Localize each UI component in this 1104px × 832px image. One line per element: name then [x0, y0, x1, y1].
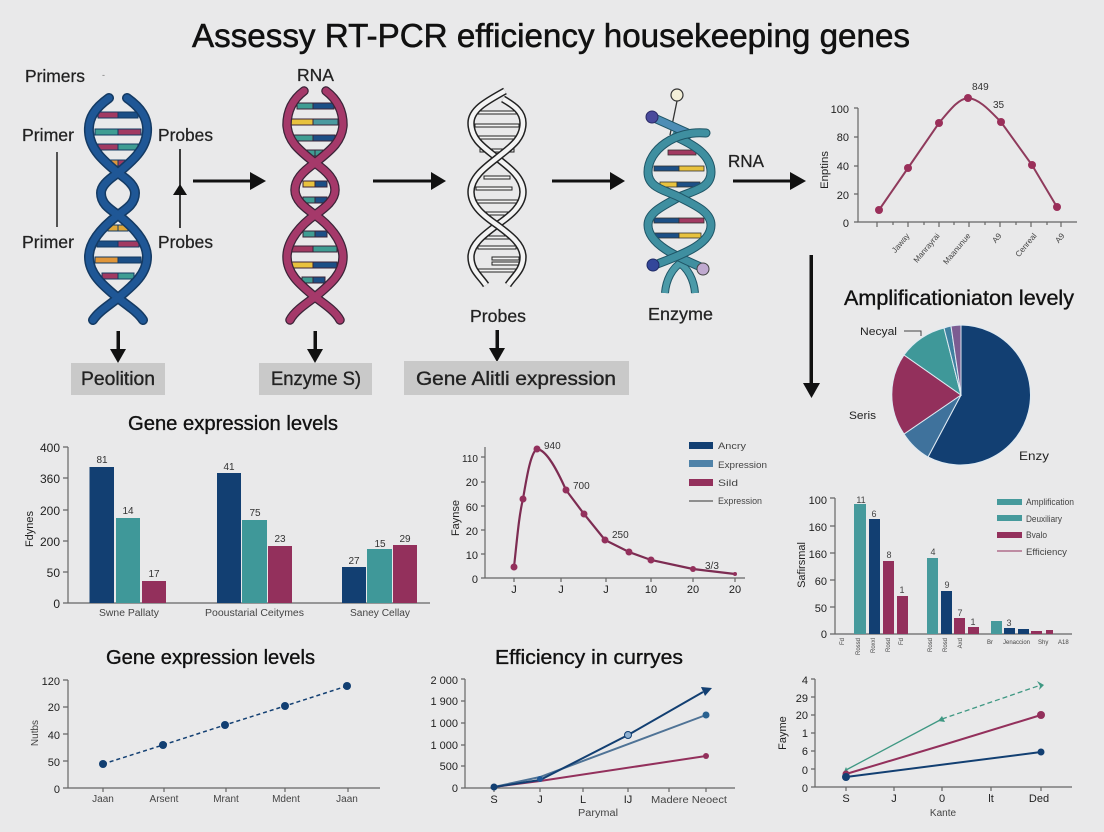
bar chart: right: 7 — [957, 608, 963, 618]
line chart: bottom left: Mdent — [272, 794, 300, 805]
bar chart: right: Rosd — [886, 638, 892, 652]
bar chart: gene expression: Swne Pallaty — [99, 608, 159, 619]
line chart: bottom left: Mrant — [213, 794, 239, 805]
line chart: bottom right: Ded — [1029, 793, 1049, 805]
line chart: decay curve: 20 — [466, 526, 478, 538]
bar chart: right: 6 — [871, 509, 877, 519]
bar chart: gene expression: 15 — [374, 539, 386, 550]
line chart: bottom right: Fayme — [777, 716, 789, 750]
bar chart: right: Fd — [840, 638, 846, 645]
line chart: top right: Maanunue — [941, 231, 973, 266]
line chart: bottom right: 6 — [802, 746, 808, 758]
primer connector line — [56, 152, 58, 227]
bar chart: right: Axd — [958, 638, 964, 648]
line chart: top right: 20 — [837, 190, 849, 202]
line chart: bottom right — [777, 675, 1072, 819]
line chart: decay curve: 700 — [573, 481, 590, 492]
helix labels: Probes — [158, 125, 213, 145]
line chart: top right — [819, 82, 1077, 266]
bar chart: right: Roxxl — [871, 638, 877, 653]
line chart: bottom left — [30, 676, 380, 805]
pie labels: Necyal — [860, 326, 897, 338]
line chart: top right: Jaway — [890, 232, 912, 255]
line chart: efficiency curves: S — [490, 794, 498, 806]
bar chart: right: A18 — [1058, 640, 1069, 646]
legend: right bar chart — [997, 497, 1074, 557]
bar chart: gene expression: 27 — [348, 556, 360, 567]
line chart: decay curve: J — [558, 584, 564, 596]
line chart: top right: 35 — [993, 100, 1005, 111]
pie chart — [892, 325, 1030, 465]
line chart: bottom right: lt — [988, 793, 994, 805]
line chart: top right: 40 — [837, 161, 849, 173]
arrows: process flow — [193, 172, 806, 190]
line chart: bottom right: 29 — [796, 693, 808, 705]
DNA helix: enzyme (teal with knobs) — [646, 89, 711, 293]
bar chart: gene expression: 17 — [148, 569, 160, 580]
box: Peolition: Peolition — [81, 369, 155, 390]
line chart: decay curve: 10 — [645, 584, 657, 596]
line chart: bottom left: 120 — [42, 676, 60, 688]
bar chart: gene expression: 81 — [96, 455, 108, 466]
bar chart: right: Jenaccion — [1003, 640, 1030, 646]
bar chart: right: 3 — [1006, 618, 1012, 628]
line chart: bottom left: 0 — [54, 784, 60, 796]
bar chart: right: 50 — [815, 603, 827, 615]
line chart: decay curve: 20 — [687, 584, 699, 596]
bar chart: right: 160 — [809, 522, 827, 534]
line chart: decay curve: J — [511, 584, 517, 596]
helix labels: Probes — [158, 232, 213, 252]
bar chart: gene expression: 0 — [53, 597, 60, 611]
bar chart: right — [796, 495, 1072, 655]
bar chart: gene expression: Pooustarial Ceitymes — [205, 608, 304, 619]
legend: right bar chart: Efficiency — [1026, 547, 1068, 557]
line chart: bottom right: 4 — [802, 675, 808, 687]
line chart: bottom right: S — [842, 793, 850, 805]
heading: gene expression levels 2: Gene expression levels — [106, 647, 315, 669]
bar chart: right: 4 — [930, 547, 936, 557]
line chart: efficiency curves: 2 000 — [430, 675, 458, 687]
bar chart: right: Rosd — [928, 638, 934, 652]
line chart: efficiency curves: IJ — [624, 794, 632, 806]
bar chart: gene expression: 360 — [40, 472, 60, 486]
line chart: efficiency curves: 0 — [452, 783, 458, 795]
line chart: bottom right: 1 — [802, 728, 808, 740]
bar chart: right: 1 — [899, 585, 905, 595]
box: Enzyme — [259, 363, 372, 395]
line chart: bottom right: 0 — [802, 783, 808, 795]
bar chart: gene expression: Saney Cellay — [350, 608, 410, 619]
bar chart: right: 8 — [886, 550, 892, 560]
legend: decay curve: Ancry — [718, 441, 747, 451]
line chart: bottom left: Jaan — [92, 794, 114, 805]
line chart: decay curve: 250 — [612, 530, 629, 541]
bar chart: right: 0 — [821, 629, 827, 641]
heading: efficiency curves: Efficiency in curryes — [495, 647, 683, 669]
helix labels: RNA — [297, 65, 334, 85]
bar chart: right: 1 — [970, 617, 976, 627]
line chart: bottom right: J — [891, 793, 897, 805]
line chart: decay curve: 20 — [729, 584, 741, 596]
bar chart: right: 100 — [809, 495, 827, 507]
line chart: decay curve: 20 — [466, 477, 478, 489]
pie labels — [849, 326, 1049, 463]
bar chart: gene expression: 200 — [40, 535, 60, 549]
bar chart: right: Br — [987, 640, 993, 646]
line chart: bottom left: 50 — [48, 757, 60, 769]
line chart: bottom right: 0 — [802, 765, 808, 777]
bar chart: gene expression: 14 — [122, 506, 134, 517]
bar chart: right: Shy — [1038, 640, 1048, 646]
line chart: efficiency curves: 1 900 — [430, 696, 458, 708]
bar chart: gene expression: 200 — [40, 504, 60, 518]
line chart: efficiency curves: Parymal — [578, 808, 618, 819]
bar chart: gene expression: 23 — [274, 534, 286, 545]
bar chart: right: Safirsmal — [796, 542, 808, 588]
line chart: bottom left: Jaan — [336, 794, 358, 805]
bar chart: gene expression: 75 — [249, 508, 261, 519]
heading: amplification: Amplificationiaton levely — [844, 287, 1075, 310]
title: Assessy RT-PCR efficiency housekeeping genes — [192, 17, 910, 54]
helix labels: Probes — [470, 306, 526, 326]
legend: right bar chart: Amplification — [1026, 497, 1074, 507]
helix labels: Enzyme — [648, 304, 713, 324]
line chart: decay curve: J — [603, 584, 609, 596]
DNA helix: RNA (crimson) — [287, 91, 343, 320]
line chart: efficiency curves: J — [537, 794, 543, 806]
line chart: efficiency curves: L — [580, 794, 586, 806]
line chart: top right: A9 — [1053, 231, 1067, 245]
line chart: bottom right: 20 — [796, 710, 808, 722]
line chart: efficiency curves: 1 000 — [430, 740, 458, 752]
line chart: decay curve: 60 — [466, 502, 478, 514]
line chart: top right: 80 — [837, 132, 849, 144]
helix labels: Primer — [22, 232, 74, 252]
box: Enzyme: Enzyme S) — [271, 369, 361, 390]
legend: decay curve — [689, 441, 767, 506]
line chart: top right: Manrayrai — [912, 231, 942, 265]
helix labels: Primer — [22, 125, 74, 145]
line chart: decay curve: Faynse — [450, 500, 462, 536]
DNA helix: primers (blue) — [89, 98, 147, 320]
bar chart: gene expression: 50 — [47, 566, 60, 580]
legend: decay curve: Sild — [718, 478, 738, 488]
bar chart: gene expression: 41 — [223, 462, 235, 473]
line chart: decay curve: 110 — [462, 454, 478, 465]
line chart: bottom left: Arsent — [150, 794, 179, 805]
heading: gene expression levels 1: Gene expression levels — [128, 413, 338, 435]
box: Peolition — [71, 363, 165, 395]
legend: right bar chart: Bvalo — [1026, 530, 1047, 540]
line chart: efficiency curves: Madere Neoect — [651, 795, 727, 806]
line chart: efficiency curves: 500 — [440, 761, 458, 773]
bar chart: gene expression — [24, 441, 430, 619]
line chart: decay curve: 0 — [472, 574, 478, 586]
line chart: top right: 100 — [831, 104, 849, 116]
legend: decay curve: Expression — [718, 460, 767, 470]
line chart: top right: 849 — [972, 82, 989, 93]
line chart: bottom right: Kante — [930, 808, 957, 819]
bar chart: gene expression: 400 — [40, 441, 60, 455]
bar chart: gene expression: Fdynes — [24, 510, 36, 547]
bar chart: right: Fd — [899, 638, 905, 645]
line chart: decay curve — [450, 441, 745, 596]
line chart: decay curve: 940 — [544, 441, 561, 452]
DNA helix: probes (outline) — [471, 91, 523, 285]
box: Gene expression: Gene Alitli expression — [416, 369, 616, 390]
bar chart: gene expression: 29 — [399, 534, 411, 545]
line chart: bottom left: 40 — [48, 730, 60, 742]
pie labels: Enzy — [1019, 449, 1049, 463]
helix labels: RNA — [728, 151, 764, 171]
legend: decay curve: Expression — [718, 496, 762, 506]
legend: right bar chart: Deuxiliary — [1026, 514, 1062, 524]
box: Gene expression — [404, 361, 629, 395]
bar chart: right: 9 — [944, 580, 950, 590]
bar chart: right: Rosd — [943, 638, 949, 652]
line chart: decay curve: 10 — [466, 550, 478, 562]
helix labels: - — [102, 70, 105, 80]
line chart: bottom left: 20 — [48, 702, 60, 714]
line chart: decay curve: 3/3 — [705, 561, 719, 572]
arrows: down — [110, 255, 820, 398]
helix labels — [22, 65, 764, 326]
line chart: top right: Cenreal — [1014, 231, 1039, 259]
bar chart: right: 60 — [815, 576, 827, 588]
line chart: bottom right: 0 — [939, 793, 945, 805]
line chart: top right: 0 — [843, 218, 849, 230]
line chart: efficiency curves — [430, 675, 735, 819]
bar chart: right: Rossd — [856, 638, 862, 655]
line chart: bottom left: Nutbs — [30, 720, 41, 746]
helix labels: Primers — [25, 66, 85, 86]
bar chart: right: 11 — [856, 495, 866, 505]
line chart: efficiency curves: 1 000 — [430, 718, 458, 730]
bar chart: right: 160 — [809, 549, 827, 561]
line chart: top right: A9 — [990, 231, 1004, 245]
arrow: probes up — [173, 149, 187, 228]
line chart: top right: Enptins — [819, 150, 831, 189]
pie labels: Seris — [849, 410, 877, 422]
